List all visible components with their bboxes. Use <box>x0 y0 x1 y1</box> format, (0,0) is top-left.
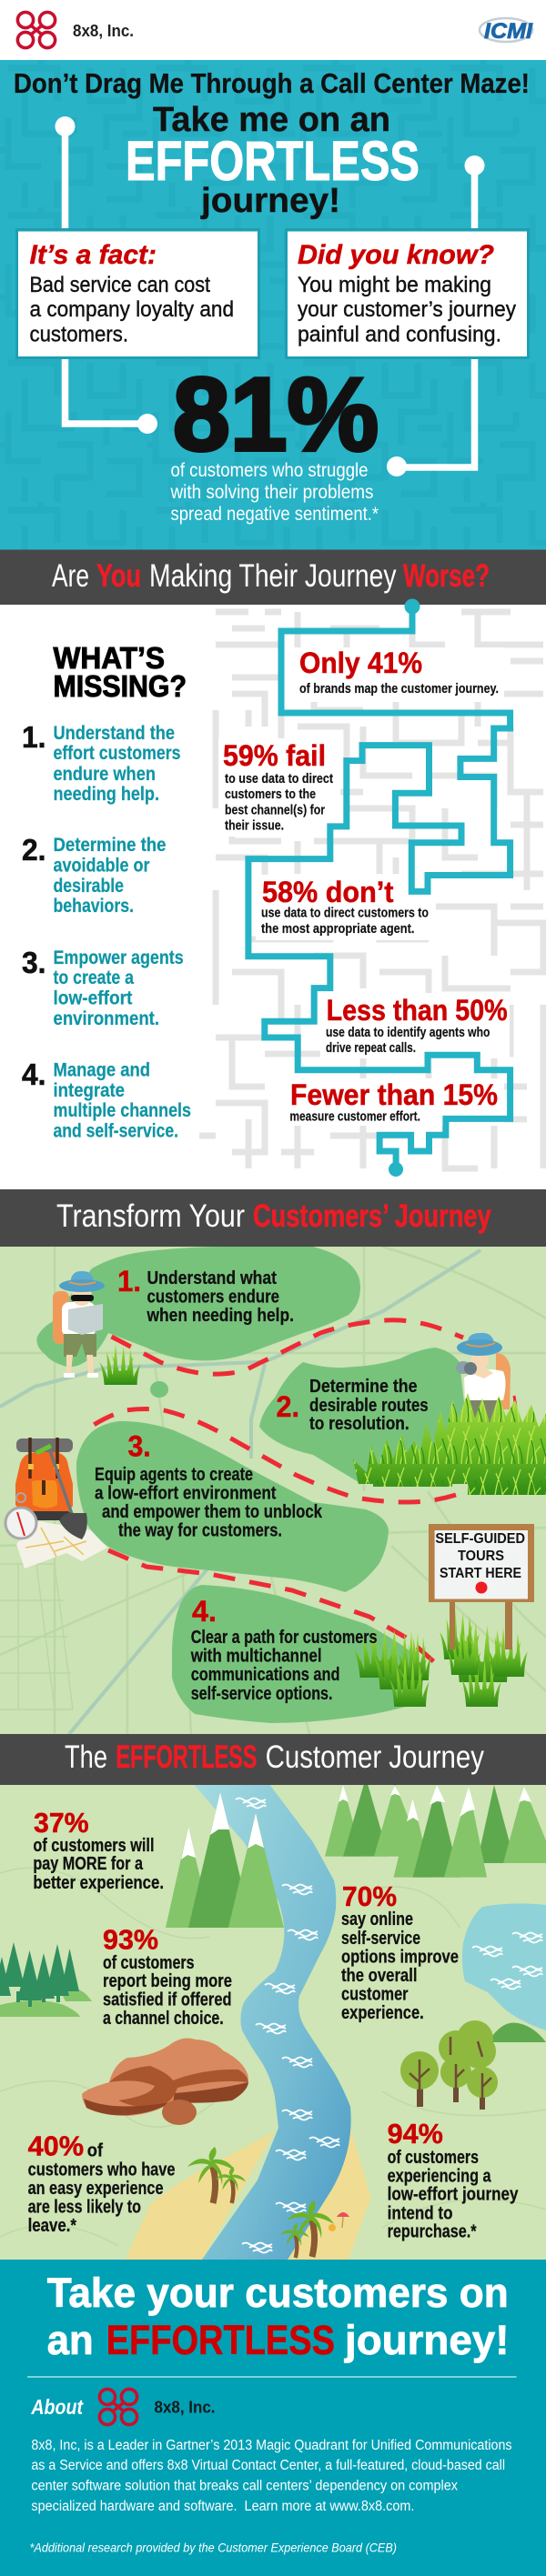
stat: 59% fail: best channel(s) for <box>225 802 325 818</box>
stat: 58% don't: use data to direct customers to <box>261 906 429 920</box>
stat: 94%: of customers <box>388 2148 479 2168</box>
stat: fewer than 15%: Fewer than 15% <box>290 1078 498 1111</box>
rock <box>82 2039 248 2125</box>
stat: 40%: an easy experience <box>28 2179 163 2199</box>
stat: 59% fail: their issue. <box>225 818 284 833</box>
item 4: Manage and <box>53 1060 150 1080</box>
callout: it's a fact <box>15 228 260 359</box>
about text: as a Service and offers 8x8 Virtual Contact Center, a full-featured, cloud-based call <box>31 2458 505 2473</box>
stat: 94%: intend to <box>388 2203 453 2223</box>
stat: 40%: customers who have <box>28 2160 175 2180</box>
panel: maze <box>199 598 543 1177</box>
stat: 70%: self-service <box>341 1929 420 1949</box>
item 2: avoidable or <box>53 855 149 877</box>
callout: it's a fact: a company loyalty and <box>29 297 234 322</box>
item 3: environment. <box>53 1008 159 1029</box>
call to action <box>47 2270 509 2363</box>
callout: did you know: painful and confusing. <box>298 322 501 347</box>
stat: less than 50%: use data to identify agents who <box>326 1025 490 1040</box>
stat: 93%: report being more <box>103 1971 232 1991</box>
item 4: multiple channels <box>53 1100 191 1121</box>
palms <box>187 2147 349 2258</box>
item 1: needing help. <box>53 784 159 805</box>
illustration: hiker with binoculars <box>456 1333 517 1423</box>
text clearings <box>218 647 510 1126</box>
mountains: by river <box>166 1792 284 1928</box>
step 1: customers endure <box>147 1287 279 1307</box>
stat: 40% <box>28 2130 175 2236</box>
stat: 70%: the overall <box>341 1966 417 1986</box>
stat: 93%: a channel choice. <box>103 2009 224 2029</box>
forest <box>0 1942 92 2017</box>
stat: 58% don't <box>261 876 429 937</box>
call to action: EFFORTLESS <box>106 2317 335 2363</box>
waves <box>236 1799 542 2253</box>
stat: 70% <box>341 1880 459 2023</box>
stat caption: spread negative sentiment.* <box>171 504 379 525</box>
item 2: desirable <box>53 876 124 897</box>
heading: take me on: Take me on an <box>153 101 390 139</box>
stat: 37%: 37% <box>34 1807 89 1839</box>
step 4: 4. <box>192 1595 217 1628</box>
call to action: Take your customers on <box>47 2270 509 2316</box>
stat: fewer than 15%: measure customer effort. <box>289 1109 420 1125</box>
step 2: Determine the <box>309 1377 417 1397</box>
sand <box>126 2128 371 2260</box>
stat caption <box>170 460 379 525</box>
big grass <box>353 1393 546 1495</box>
8x8 wordmark: 8x8, Inc. <box>73 22 134 40</box>
step 4 <box>190 1595 377 1704</box>
band: are you making it worse: Making Their Journey <box>149 558 397 594</box>
stat: 58% don't: the most appropriate agent. <box>261 921 414 937</box>
stat: 70%: say online <box>341 1909 413 1929</box>
hill <box>488 2022 546 2042</box>
step 4: with multichannel <box>190 1647 322 1667</box>
stat: 94% <box>388 2118 519 2242</box>
sign: self-guided tours: SELF-GUIDED <box>435 1531 525 1547</box>
step 3: and empower them to unblock <box>102 1502 323 1522</box>
about heading <box>31 2389 215 2425</box>
callout: it's a fact: It’s a fact: <box>29 240 157 270</box>
step 3: Equip agents to create <box>95 1465 253 1485</box>
panel: transform map <box>0 1247 546 1734</box>
item 3: Empower agents <box>53 947 184 968</box>
heading: journey: journey! <box>200 182 340 220</box>
item 3: 3. <box>22 946 46 979</box>
stat: 93%: 93% <box>103 1923 158 1955</box>
step 3: 3. <box>127 1430 151 1463</box>
stat: 59% fail <box>223 739 333 833</box>
stat: 58% don't: 58% don’t <box>262 876 394 908</box>
stat: 40%: of <box>87 2140 103 2160</box>
band: effortless journey <box>0 1734 546 1785</box>
sign: self-guided tours: TOURS <box>458 1549 504 1564</box>
stat: 93%: of customers <box>103 1953 195 1973</box>
item 4: integrate <box>53 1080 125 1101</box>
step 2: 2. <box>277 1390 299 1423</box>
step 4: self-service options. <box>191 1684 333 1704</box>
stat: 81%: 81% <box>173 357 379 473</box>
stat: fewer than 15% <box>289 1078 498 1125</box>
band: are you making it worse: You <box>96 558 141 594</box>
green blobs <box>36 1247 473 1723</box>
callout: it's a fact: customers. <box>29 322 128 347</box>
about heading: About <box>31 2395 84 2419</box>
stat: only 41%: of brands map the customer journey. <box>299 681 499 697</box>
stat: 93% <box>103 1923 232 2029</box>
panel: hero <box>0 60 546 550</box>
item 4: 4. <box>22 1057 46 1091</box>
heading: effortless: EFFORTLESS <box>126 130 420 192</box>
panel: what's missing <box>22 641 191 1141</box>
item 1 <box>22 720 180 805</box>
heading: what's missing: MISSING? <box>53 669 187 703</box>
stat caption: of customers who struggle <box>171 460 368 481</box>
item 2: 2. <box>22 833 46 867</box>
stat: 94%: experiencing a <box>388 2166 491 2186</box>
panel: footer <box>0 2260 546 2576</box>
step 1 <box>117 1265 294 1326</box>
stat: less than 50% <box>326 994 508 1056</box>
step 4: Clear a path for customers <box>191 1628 377 1648</box>
stat caption: with solving their problems <box>170 482 373 503</box>
band: effortless journey: EFFORTLESS <box>116 1739 257 1775</box>
logo: ICMI: ICMI <box>484 19 533 44</box>
stat: 94%: repurchase.* <box>388 2222 477 2242</box>
step 1: Understand what <box>147 1268 277 1288</box>
stat: 59% fail: to use data to direct <box>225 771 333 787</box>
stat: 94%: low-effort journey <box>388 2185 519 2205</box>
step 1: when needing help. <box>147 1306 294 1326</box>
stat: 40%: leave.* <box>28 2216 76 2236</box>
item 2: behaviors. <box>53 896 134 917</box>
call to action: journey! <box>344 2317 510 2363</box>
mountains: top right <box>325 1778 546 1878</box>
stat: only 41% <box>299 647 499 697</box>
grass tuft small <box>100 1344 140 1385</box>
item 1: effort customers <box>53 743 180 764</box>
stat: 37%: of customers will <box>33 1836 155 1856</box>
step 2 <box>277 1377 429 1434</box>
stat: 70%: experience. <box>341 2003 424 2023</box>
stat: 40%: are less likely to <box>28 2197 141 2217</box>
stat: less than 50%: drive repeat calls. <box>326 1040 416 1056</box>
stat: 93%: satisfied if offered <box>103 1990 231 2010</box>
river <box>195 1785 351 2260</box>
panel: effortless journey landscape <box>0 1778 546 2260</box>
stat: 37% <box>33 1807 164 1893</box>
item 2 <box>22 833 166 917</box>
callout: did you know: your customer’s journey <box>298 297 516 322</box>
trees <box>400 2020 498 2110</box>
stat: less than 50%: Less than 50% <box>327 994 508 1027</box>
lake <box>462 1903 546 2030</box>
item 3: to create a <box>53 967 134 988</box>
step 2: to resolution. <box>309 1414 410 1434</box>
logo: 8x8 <box>17 12 56 48</box>
band: are you making it worse: Worse? <box>403 558 490 594</box>
stat: 40%: 40% <box>28 2130 84 2162</box>
band: are you making it worse: Are <box>52 558 89 594</box>
stat: 59% fail: customers to the <box>225 787 316 802</box>
band: transform: Transform Your <box>56 1198 245 1234</box>
heading: what's missing: WHAT’S <box>53 641 165 675</box>
about text <box>31 2438 512 2514</box>
stat: 70%: customer <box>341 1985 409 2005</box>
sign: self-guided tours <box>429 1524 534 1649</box>
about text: 8x8, Inc, is a Leader in Gartner’s 2013 Magic Quadrant for Unified Communications <box>31 2438 512 2453</box>
callout: did you know: Did you know? <box>298 240 494 270</box>
footnote: *Additional research provided by the Customer Experience Board (CEB) <box>29 2541 397 2555</box>
band: are you making it worse <box>0 549 546 605</box>
step 1: 1. <box>117 1265 141 1298</box>
item 1: endure when <box>53 764 156 785</box>
band: transform <box>0 1189 546 1247</box>
stat: 37%: better experience. <box>33 1873 164 1893</box>
header: logos <box>17 12 533 48</box>
stat: 37%: pay MORE for a <box>33 1854 144 1874</box>
dashed trail <box>86 1320 463 1666</box>
band: effortless journey: The <box>65 1739 107 1775</box>
item 1: Understand the <box>53 723 175 744</box>
maze route <box>248 598 511 1177</box>
band: effortless journey: Customer Journey <box>266 1739 484 1775</box>
illustration: hiker with map <box>53 1271 105 1378</box>
call to action: an <box>47 2317 94 2363</box>
illustration: backpack, compass, map <box>5 1438 107 1569</box>
step 3: the way for customers. <box>118 1521 282 1541</box>
stat: only 41%: Only 41% <box>299 647 422 679</box>
grass clumps <box>354 1609 528 1707</box>
item 1: 1. <box>22 720 46 754</box>
about text: center software solution that breaks call centers’ dependency on complex <box>31 2479 458 2494</box>
item 3: low-effort <box>53 987 132 1009</box>
connector: left <box>55 116 157 434</box>
about heading: 8x8, Inc. <box>155 2399 215 2417</box>
item 4: and self-service. <box>53 1120 178 1141</box>
about text: specialized hardware and software. Learn more at www.8x8.com. <box>31 2499 414 2514</box>
step 4: communications and <box>191 1665 340 1685</box>
stat: 70%: 70% <box>342 1880 397 1912</box>
stat: 59% fail: 59% fail <box>223 739 326 772</box>
callout: it's a fact: Bad service can cost <box>29 273 210 297</box>
stat: 70%: options improve <box>341 1948 459 1968</box>
item 2: Determine the <box>53 835 166 856</box>
step 2: desirable routes <box>309 1396 429 1416</box>
item 3 <box>22 946 184 1029</box>
heading: what's missing <box>53 641 187 703</box>
callout: did you know <box>285 228 530 359</box>
item 4 <box>22 1057 191 1141</box>
connector: right <box>387 155 484 476</box>
step 3 <box>95 1430 323 1541</box>
sign: self-guided tours: START HERE <box>440 1566 521 1581</box>
step 3: a low-effort environment <box>95 1484 277 1504</box>
callout: did you know: You might be making <box>298 273 491 297</box>
stat: 94%: 94% <box>388 2118 443 2150</box>
